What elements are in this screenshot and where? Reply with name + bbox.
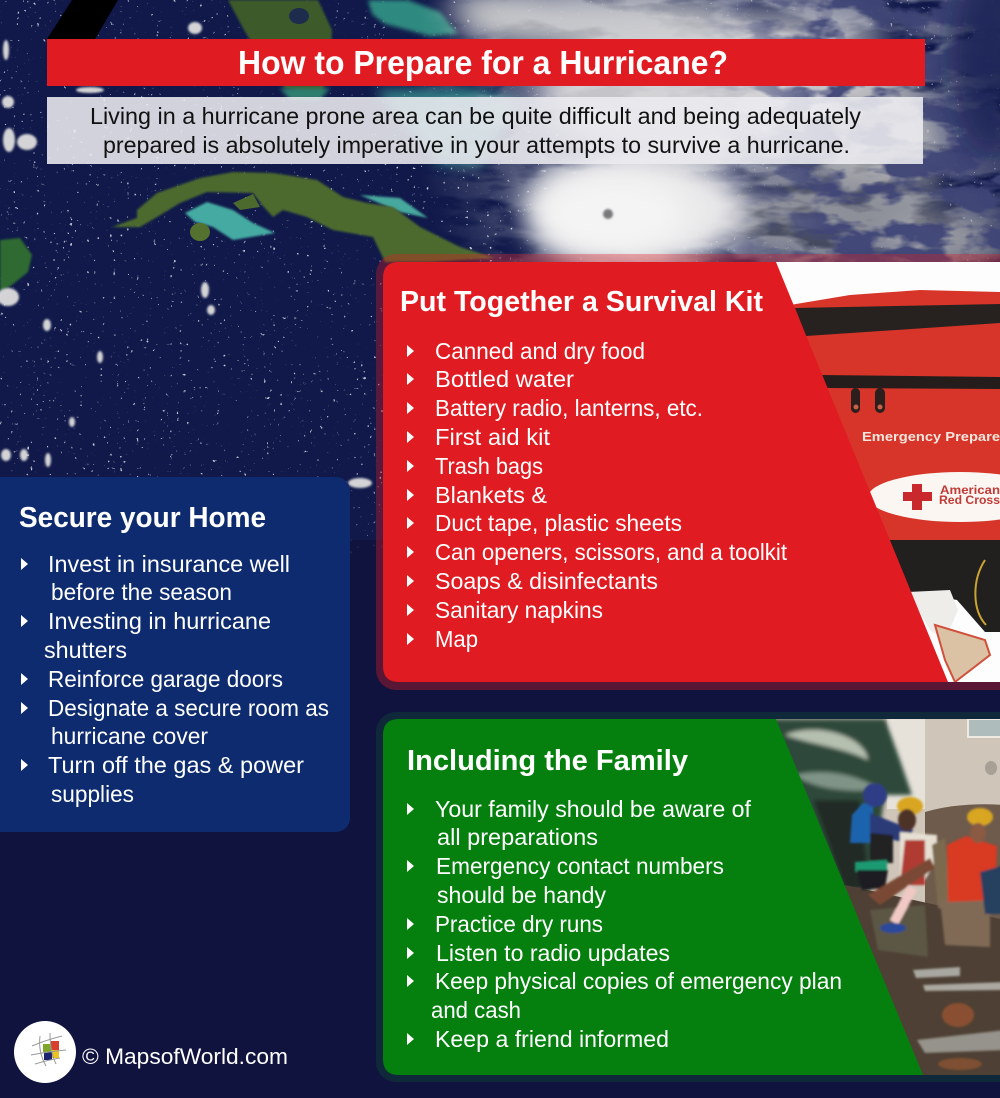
- survival kit list: Canned and dry food: [435, 338, 645, 364]
- home list: Invest in insurance well: [48, 551, 290, 577]
- heading: Secure your Home: [19, 502, 266, 534]
- title bar: [47, 39, 925, 86]
- home list: Reinforce garage doors: [48, 666, 283, 692]
- survival kit list: Bottled water: [435, 366, 574, 392]
- survival kit list: Can openers, scissors, and a toolkit: [435, 539, 788, 565]
- cloud bands: [445, 0, 1000, 266]
- home list: Investing in hurricane: [48, 608, 271, 634]
- family list: should be handy: [437, 882, 606, 908]
- survival kit list: Trash bags: [435, 453, 543, 479]
- panel: Put Together a Survival Kit: [376, 254, 1000, 690]
- home list: Turn off the gas & power: [48, 752, 304, 778]
- photo: rescuers wading through flood: [770, 719, 1000, 1075]
- family list: all preparations: [437, 824, 598, 850]
- home list: [21, 551, 329, 807]
- family list: and cash: [431, 997, 521, 1023]
- child: [850, 803, 873, 843]
- heading: Put Together a Survival Kit: [400, 286, 763, 318]
- photo: emergency kit bag: [760, 262, 1000, 682]
- survival kit list: Soaps & disinfectants: [435, 568, 658, 594]
- photo: emergency kit bag: Red Cross: [939, 495, 1000, 507]
- family list: Practice dry runs: [435, 911, 603, 937]
- heading: Including the Family: [407, 745, 688, 777]
- survival kit list: Sanitary napkins: [435, 597, 603, 623]
- green diagonal panel: [383, 719, 923, 1075]
- red diagonal panel: [383, 262, 948, 682]
- family list: Listen to radio updates: [436, 940, 670, 966]
- family list: [407, 796, 842, 1052]
- intro text block: Living in a hurricane prone area can be quite difficult and being adequately: [90, 103, 861, 129]
- rescuer two: [932, 838, 950, 910]
- hurricane core: [523, 150, 747, 270]
- survival kit list: Blankets &: [435, 482, 547, 508]
- home list: hurricane cover: [51, 723, 208, 749]
- survival kit list: Battery radio, lanterns, etc.: [435, 395, 703, 421]
- photo: emergency kit bag: Emergency Prepare: [862, 430, 1000, 444]
- survival kit list: First aid kit: [435, 424, 551, 450]
- Bahamas shallows: [368, 0, 458, 36]
- panel: Including the Family: [376, 712, 1000, 1082]
- intro text block: prepared is absolutely imperative in your attempts to survive a hurricane.: [103, 132, 850, 158]
- home list: before the season: [51, 579, 232, 605]
- survival kit list: Map: [435, 626, 478, 652]
- home list: shutters: [44, 637, 127, 663]
- rescuer one: [900, 832, 937, 880]
- family list: Your family should be aware of: [435, 796, 752, 822]
- scattered white clouds: [0, 22, 372, 488]
- logo: MapsofWorld globe: [14, 1021, 76, 1083]
- Florida: [228, 0, 332, 98]
- Cuba: [112, 172, 495, 262]
- survival kit list: [407, 338, 788, 652]
- credit line: © MapsofWorld.com: [82, 1044, 288, 1069]
- dark open ocean at the right edge: [950, 0, 1000, 155]
- family list: Keep a friend informed: [435, 1026, 669, 1052]
- dark diagonal corner: [47, 0, 118, 39]
- home list: supplies: [51, 781, 134, 807]
- home list: Designate a secure room as: [48, 695, 329, 721]
- panel: Secure your Home: [0, 477, 350, 832]
- background: satellite view of the Caribbean with a hurricane: [0, 0, 1000, 554]
- intro text block: [47, 97, 923, 164]
- survival kit list: Duct tape, plastic sheets: [435, 510, 682, 536]
- photo: emergency kit bag: American: [940, 485, 1000, 497]
- Yucatan: [0, 238, 32, 292]
- family list: Emergency contact numbers: [436, 853, 724, 879]
- title bar: How to Prepare for a Hurricane?: [238, 44, 728, 81]
- family list: Keep physical copies of emergency plan: [435, 968, 842, 994]
